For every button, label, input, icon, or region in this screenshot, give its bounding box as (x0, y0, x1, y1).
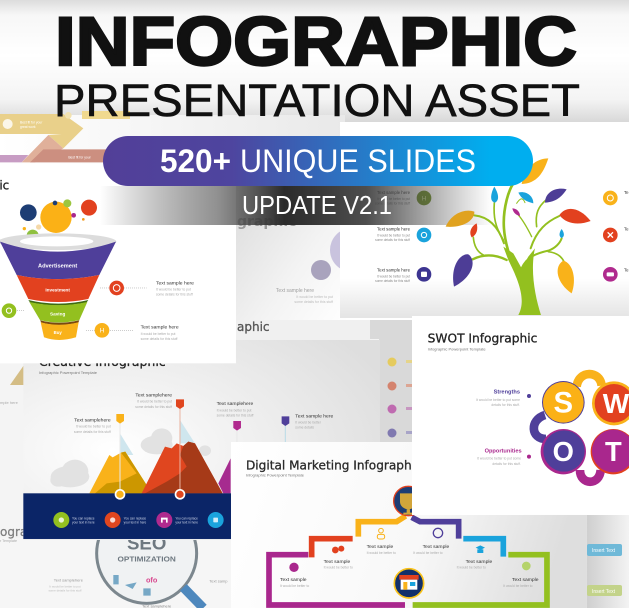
text labels: It would be better to put (137, 400, 172, 404)
panel: left edge slide (0, 362, 24, 542)
panel: SEO optimization slide: ofo (146, 576, 158, 585)
navy footer band: You can replace (72, 516, 95, 520)
panel: funnel infographic slide (0, 163, 236, 363)
marker: saving (2, 303, 24, 318)
panel: SWOT infographic slide (412, 316, 629, 515)
banner: 520+ unique slides (103, 136, 533, 186)
label: opportunities (477, 449, 531, 466)
navy footer band (23, 489, 237, 539)
panel: SEO optimization slide: SEO (127, 532, 166, 553)
funnel chart: Buy (54, 330, 62, 335)
panel: top-left faded slide: Best fit for your (68, 155, 92, 159)
SWOT circle T: T (605, 436, 622, 467)
icons: right column (603, 190, 629, 282)
banner: 520+ unique slides: UNIQUE SLIDES (240, 143, 476, 179)
step labels: It would be better to (280, 584, 309, 588)
text labels: some details for this stuff (217, 414, 253, 418)
clouds (50, 428, 211, 487)
text labels: Text sample here (295, 413, 333, 419)
icons: left column (417, 191, 431, 282)
left labels: It would be better to put (377, 197, 410, 201)
panel: SEO optimization slide: some details for this stuff (49, 589, 82, 593)
marker: buy (86, 323, 179, 341)
funnel chart: Investment (45, 288, 70, 293)
panel: left edge slide: mple here (0, 400, 19, 405)
icons: right column: Te (624, 226, 629, 231)
step labels: Text sample (423, 544, 449, 550)
marker: buy: It would be better to put (141, 332, 176, 336)
chart: stepped path (269, 516, 547, 605)
SWOT circle W (592, 381, 629, 425)
label: strengths: details for this stuff. (491, 403, 520, 407)
SWOT circle O: O (553, 436, 574, 467)
icon: trophy (394, 486, 423, 516)
banner: 520+ unique slides: 520+ (160, 143, 231, 179)
text labels: It would be better (295, 420, 322, 424)
SWOT circle S: S (554, 387, 573, 420)
panel: right-side timeline slide (370, 320, 412, 442)
title: infographic: INFOGRAPHIC (55, 3, 577, 80)
step labels: Text sample (324, 559, 350, 565)
SWOT connectors (534, 374, 602, 482)
heading: creative infographic: Creative Infographic (39, 355, 166, 369)
text labels: some details for this stuff (74, 430, 111, 434)
panel: SEO optimization slide (0, 503, 231, 608)
left labels: It would be better to put (377, 233, 410, 237)
panel: middle grey slide: graphic (237, 214, 296, 230)
panel: digital marketing infographic slide (231, 442, 587, 608)
heading: digital marketing: Digital Marketing Infograph (246, 458, 412, 472)
panel: digital marketing infographic slide: Infographic Powerpoint Template (246, 472, 305, 477)
text labels (74, 393, 333, 434)
label: strengths: It would be better to put some (476, 398, 520, 402)
SWOT circle O (541, 429, 586, 474)
marker: investment: some details for this stuff (156, 292, 193, 296)
step labels: Text sample (280, 577, 307, 583)
marker: investment: Text sample here (156, 280, 194, 286)
panel: SEO optimization slide: r Template (0, 539, 17, 543)
step labels: It would be better to (503, 584, 533, 588)
icons: left column: H (422, 196, 426, 202)
marker: buy: Text sample here (141, 325, 179, 331)
grey update band (100, 186, 492, 225)
marker: investment: It would be better to put (156, 287, 191, 291)
step labels: It would be better to (413, 551, 443, 555)
chart: red mountain (142, 408, 223, 493)
text labels: Text samplehere (74, 418, 111, 424)
left labels: some details for this stuff (375, 202, 410, 206)
navy footer band: You can replace (124, 516, 146, 520)
panel: middle grey slide (236, 165, 382, 350)
marker: buy: some details for this stuff (141, 337, 177, 341)
panel: insert text slide: Insert Text (592, 548, 616, 554)
text labels: Text samplehere (135, 393, 172, 399)
chart: magenta mountain (218, 458, 231, 493)
navy footer band: You can replace (175, 516, 198, 520)
marker: buy: H (100, 328, 105, 335)
navy footer band: your text in here (72, 520, 95, 524)
text labels: some details for this stuff (135, 405, 172, 409)
label: opportunities: It would be better to put some (477, 457, 521, 461)
text labels: Text samplehere (217, 401, 253, 407)
panel: creative infographic slide (23, 340, 380, 540)
panel: top-left faded slide: great work (20, 125, 36, 129)
floating circles (20, 199, 97, 246)
navy footer band: your text in here (175, 520, 198, 524)
panel: SEO optimization slide: Text samp (209, 579, 228, 584)
icons: right column: Te (624, 267, 629, 272)
chart: yellow mountain (89, 418, 147, 493)
panel: SEO optimization slide: Text samplehere (54, 578, 84, 583)
left labels: It would be better to put (377, 274, 410, 278)
illustration: tree (446, 158, 591, 315)
marker: investment (100, 280, 194, 296)
panel: middle grey slide: some details for this stuff (294, 300, 333, 304)
step labels: It would be better to (367, 551, 396, 555)
heading: SWOT: SWOT Infographic (428, 331, 537, 346)
panel: creative infographic slide: Infographic Powerpoint Template (39, 370, 98, 375)
subtitle: presentation asset: PRESENTATION ASSET (54, 75, 580, 126)
left labels: some details for this stuff (375, 238, 410, 242)
panel: SWOT infographic slide: Infographic Powerpoint Template (428, 346, 486, 351)
leaves (446, 158, 591, 293)
label: strengths (476, 389, 531, 407)
SWOT circle W: W (603, 388, 629, 419)
text labels: It would be better to put (76, 425, 111, 429)
panel: middle grey slide: aphic (237, 320, 270, 334)
funnel chart: Saving (50, 312, 65, 317)
step labels: Text sample (466, 559, 492, 565)
text labels: some details (295, 426, 314, 430)
label: opportunities: details for this stuff. (492, 462, 521, 466)
panel: middle grey slide: Text sample here (276, 288, 314, 294)
left labels: Text sample here (377, 226, 411, 231)
label: strengths: Strengths (494, 389, 520, 395)
step labels: It would be better to (457, 566, 486, 570)
panel: SEO optimization slide: ogra (0, 525, 27, 539)
icon: storefront (394, 569, 424, 598)
step icons (289, 528, 531, 572)
step labels: Text sample (512, 577, 539, 583)
funnel chart: Advertisement (38, 264, 77, 270)
label: update v2.1: UPDATE V2.1 (242, 190, 392, 220)
icon: magnifying glass (97, 503, 203, 608)
step labels (280, 544, 539, 588)
left labels (375, 190, 411, 283)
step labels: Text sample (367, 544, 393, 550)
panel: tree infographic slide (340, 122, 629, 318)
SWOT circle S (542, 381, 585, 424)
text labels: It would be better to put (217, 408, 252, 412)
navy footer band: your text in here (124, 520, 147, 524)
left labels: Text sample here (377, 190, 411, 195)
label: opportunities: Opportunities (485, 449, 522, 455)
panel: top-left faded slide (0, 111, 345, 165)
left labels: Text sample here (377, 267, 411, 272)
panel: top-left faded slide: Best fit for your (20, 120, 43, 124)
left labels: some details for this stuff (375, 279, 410, 283)
panel: SEO optimization slide: OPTIMIZATION (117, 555, 176, 564)
funnel chart (0, 233, 116, 340)
page background (0, 0, 629, 124)
flag markers (116, 399, 289, 443)
panel: insert text slide: Insert Text (592, 589, 616, 595)
tree trunk and branches (473, 183, 564, 315)
icons: right column: Te (624, 190, 629, 195)
SWOT circle T (591, 429, 629, 474)
panel: insert text slide (587, 515, 629, 608)
step labels: It would be better to (324, 566, 353, 570)
panel: SEO optimization slide: It would be better to put (49, 585, 81, 589)
panel: middle grey slide: It would be better to put (296, 295, 333, 299)
